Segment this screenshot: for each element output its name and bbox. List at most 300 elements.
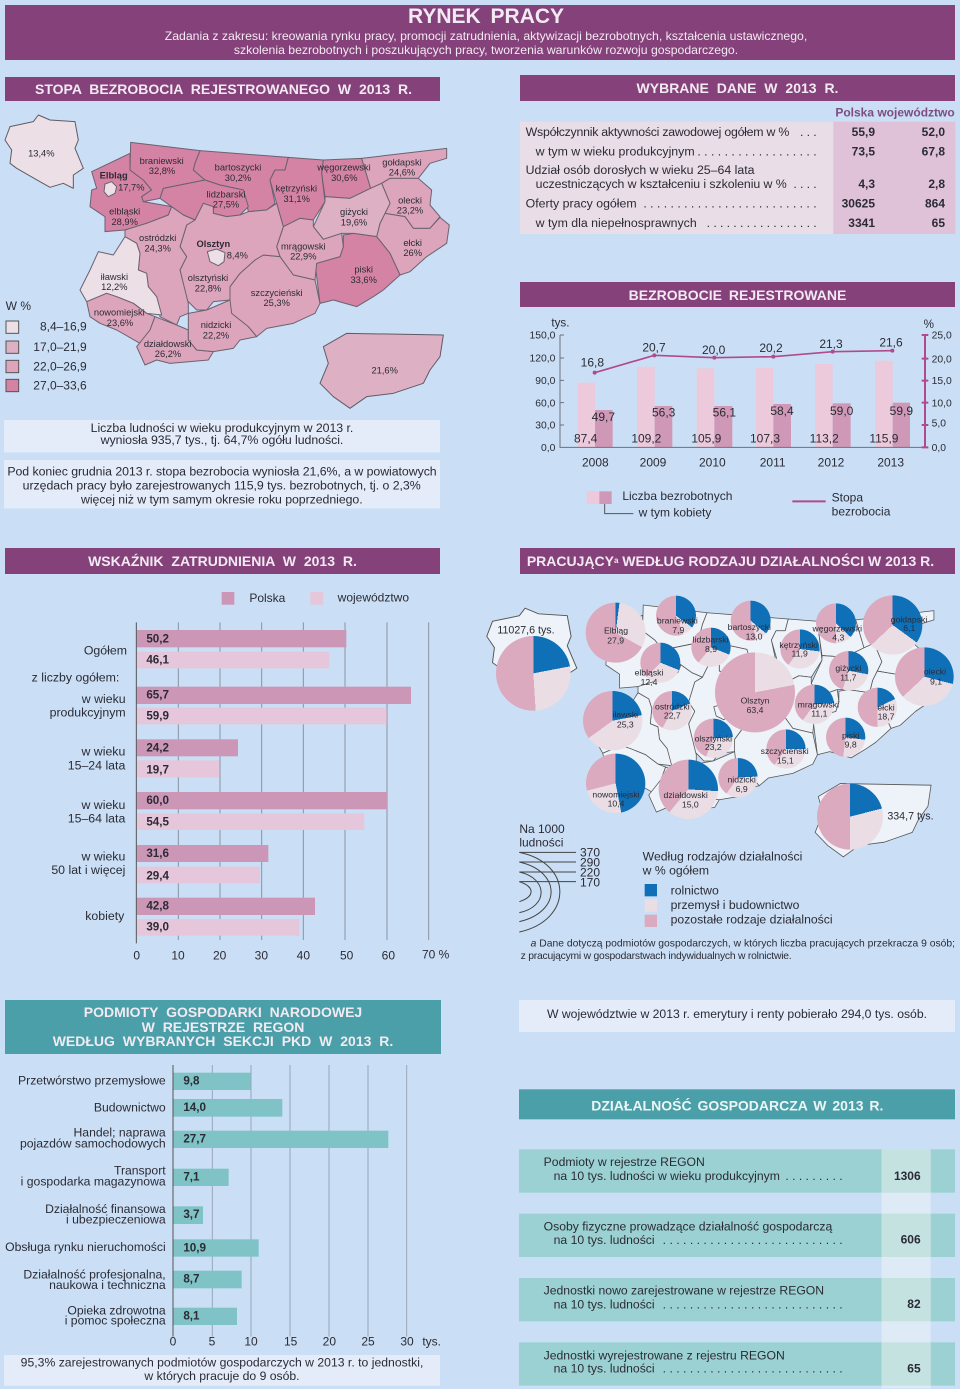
legend: size scale: 290 bbox=[580, 856, 600, 870]
county labels: bartoszycki bbox=[215, 163, 261, 173]
county labels: Elbląg bbox=[100, 170, 128, 180]
category labels: z liczby ogółem: bbox=[32, 670, 119, 684]
bar values: 50,2 bbox=[146, 632, 170, 645]
bar values: 31,6 bbox=[146, 847, 170, 860]
map: Poland inset: 13,4% bbox=[28, 149, 55, 159]
category labels: w wieku bbox=[80, 798, 125, 812]
legend: sector types: rolnictwo bbox=[671, 884, 719, 898]
county labels: 12,2% bbox=[101, 282, 128, 292]
bars bbox=[173, 1073, 388, 1325]
bar values: 10,9 bbox=[183, 1241, 207, 1254]
county labels: nidzicki bbox=[201, 320, 231, 330]
subtitle: szkolenia bezrobotnych i poszukujących pracy, tworzenia warunków rozwoju gospodarczego. bbox=[234, 43, 738, 57]
value labels: 105,9 bbox=[691, 431, 722, 445]
legend: sector types: Według rodzajów działalności bbox=[643, 850, 802, 864]
pie labels: piski bbox=[842, 731, 859, 741]
category labels: Działalność finansowa bbox=[45, 1202, 166, 1216]
bar values: 8,1 bbox=[183, 1310, 200, 1323]
county labels: węgorzewski bbox=[316, 163, 371, 173]
table: selected data: uczestniczących w kształceniu i szkoleniu w % bbox=[536, 177, 787, 191]
category labels: 50 lat i więcej bbox=[51, 863, 125, 877]
category labels bbox=[5, 1073, 166, 1328]
heading: wskaźnik zatrudnienia: WSKAŹNIK ZATRUDNIENIA W 2013 R. bbox=[88, 553, 357, 569]
pie labels: giżycki bbox=[835, 663, 861, 673]
callout: small entities: 95,3% zarejestrowanych podmiotów gospodarczych w 2013 r. to jednostki, bbox=[21, 1356, 423, 1370]
legend: W %: 22,0–26,9 bbox=[33, 359, 87, 373]
footnote: z pracującymi w gospodarstwach indywidualnych w rolnictwie. bbox=[521, 951, 792, 962]
bar values: 46,1 bbox=[146, 653, 170, 666]
value labels: 59,9 bbox=[890, 404, 913, 418]
pie labels: olecki bbox=[924, 667, 946, 677]
pie labels: 4,3 bbox=[832, 633, 845, 643]
year labels: 2010 bbox=[699, 456, 726, 470]
callout: working-age population bbox=[4, 420, 440, 452]
county labels: kętrzyński bbox=[276, 184, 317, 194]
bars: total unemployed bbox=[578, 361, 893, 447]
category labels: Przetwórstwo przemysłowe bbox=[18, 1073, 166, 1087]
axis labels: 50 bbox=[340, 948, 354, 962]
value labels: 20,7 bbox=[642, 341, 666, 355]
axis labels: 0 bbox=[133, 948, 140, 962]
title banner bbox=[5, 5, 955, 60]
table: selected data: w tym dla niepełnosprawnych bbox=[535, 216, 697, 230]
county labels: ostródzki bbox=[139, 233, 176, 243]
category labels: i ubezpieczeniowa bbox=[66, 1212, 166, 1226]
heading: wskaźnik zatrudnienia bbox=[5, 548, 440, 574]
row labels: . . . . . . . . . bbox=[785, 1169, 843, 1183]
pie labels: 334,7 tys. bbox=[887, 810, 934, 822]
county labels: 30,6% bbox=[331, 173, 358, 183]
heading: pracujący: a bbox=[614, 556, 618, 565]
bar values bbox=[146, 632, 170, 934]
value labels bbox=[574, 335, 913, 445]
pie labels: 11027,6 tys. bbox=[497, 624, 555, 636]
category labels: Handel; naprawa bbox=[74, 1126, 166, 1140]
pie labels: 23,2 bbox=[705, 742, 722, 752]
combo chart: registered unemployed and rate: 0,0 bbox=[932, 443, 946, 454]
legend: w tym kobiety bbox=[638, 506, 711, 520]
pie labels: 9,1 bbox=[930, 677, 942, 687]
pie labels: 11,9 bbox=[792, 649, 808, 659]
axis labels: 70 % bbox=[422, 948, 450, 962]
table: selected data: . . . . bbox=[793, 177, 817, 191]
category labels: Opieka zdrowotna bbox=[67, 1303, 166, 1317]
legend: Liczba bezrobotnych bbox=[622, 489, 732, 503]
table: selected data bbox=[520, 105, 956, 234]
callout: working-age population: Liczba ludności w wieku produkcyjnym w 2013 r. bbox=[91, 421, 353, 435]
row labels: Jednostki wyrejestrowane z rejestru REGON bbox=[544, 1348, 785, 1362]
axis labels: 20 bbox=[323, 1335, 336, 1349]
row values: 82 bbox=[907, 1297, 921, 1311]
pie labels: braniewski bbox=[657, 615, 698, 625]
category labels: w wieku bbox=[81, 692, 126, 706]
row labels: Jednostki nowo zarejestrowane w rejestrze REGON bbox=[544, 1284, 824, 1298]
heading: wybrane dane: WYBRANE DANE W 2013 R. bbox=[637, 80, 838, 96]
bar values: 54,5 bbox=[146, 815, 170, 828]
table: selected data: 65 bbox=[932, 216, 945, 230]
pie labels bbox=[497, 614, 946, 822]
bar values: 24,2 bbox=[146, 741, 170, 754]
heading: wybrane dane bbox=[520, 75, 955, 101]
rows bbox=[519, 1149, 955, 1386]
pie labels: 12,4 bbox=[641, 677, 658, 687]
value column bbox=[882, 1149, 931, 1388]
pie labels: mrągowski bbox=[798, 699, 839, 709]
pie labels: kętrzyński bbox=[779, 640, 818, 650]
county labels: giżycki bbox=[340, 207, 368, 217]
bar values: 8,7 bbox=[183, 1273, 200, 1286]
map: Poland inset bbox=[5, 115, 83, 188]
combo chart: registered unemployed and rate: 30,0 bbox=[535, 421, 556, 432]
pie labels: 8,9 bbox=[705, 644, 717, 654]
county labels: nowomiejski bbox=[94, 308, 145, 318]
axis labels: 0 bbox=[170, 1335, 177, 1349]
heading: stopa bezrobocia bbox=[5, 77, 440, 101]
bars: women bbox=[595, 403, 910, 447]
bar values: 29,4 bbox=[146, 869, 170, 882]
table: selected data: 2,8 bbox=[928, 177, 945, 191]
county labels: 23,6% bbox=[107, 318, 133, 328]
callout: working-age population: wyniosła 935,7 tys., tj. 64,7% ogółu ludności. bbox=[100, 433, 343, 447]
pie labels: olsztyński bbox=[695, 733, 732, 743]
category labels: kobiety bbox=[85, 909, 125, 923]
county labels: szczycieński bbox=[251, 288, 303, 298]
combo chart: registered unemployed and rate: 25,0 bbox=[932, 331, 952, 342]
county labels: 25,3% bbox=[263, 298, 290, 308]
bar values: 7,1 bbox=[183, 1171, 200, 1184]
heading: podmioty gospodarki: PODMIOTY GOSPODARKI NARODOWEJ bbox=[84, 1004, 362, 1020]
map: voivodeship counties bbox=[80, 142, 449, 365]
pie labels: nowomiejski bbox=[592, 789, 640, 799]
value labels: 87,4 bbox=[574, 431, 598, 445]
map: voivodeship total bbox=[320, 333, 443, 408]
pie labels: 7,9 bbox=[672, 625, 685, 635]
row values: 1306 bbox=[894, 1169, 921, 1183]
heading: stopa bezrobocia: STOPA BEZROBOCIA REJESTROWANEGO W 2013 R. bbox=[35, 81, 412, 97]
combo chart: registered unemployed and rate: 5,0 bbox=[932, 419, 946, 430]
pie labels: Olsztyn bbox=[741, 696, 770, 706]
pie labels: ełcki bbox=[877, 702, 895, 712]
combo chart: registered unemployed and rate: 90,0 bbox=[535, 376, 556, 387]
pie labels: 22,7 bbox=[664, 711, 681, 721]
legend: sector types: pozostałe rodzaje działalności bbox=[671, 913, 833, 927]
table: selected data: Polska województwo bbox=[835, 105, 955, 119]
legend: size scale bbox=[519, 822, 600, 932]
combo chart: registered unemployed and rate: 0,0 bbox=[541, 443, 556, 454]
value labels: 109,2 bbox=[631, 431, 662, 445]
county labels: 26% bbox=[403, 248, 422, 258]
text block: unemployment summary: Pod koniec grudnia 2013 r. stopa bezrobocia wyniosła 21,6%, a w powiatowych bbox=[7, 464, 437, 478]
combo chart: registered unemployed and rate: 120,0 bbox=[529, 354, 556, 365]
county labels: 30,2% bbox=[225, 173, 251, 183]
axis labels: 30 bbox=[400, 1335, 414, 1349]
category labels: pojazdów samochodowych bbox=[20, 1136, 166, 1150]
heading: podmioty gospodarki: WEDŁUG WYBRANYCH SEKCJI PKD W 2013 R. bbox=[53, 1033, 393, 1049]
county labels: 22,2% bbox=[203, 330, 229, 340]
year labels: 2013 bbox=[877, 456, 904, 470]
callout: small entities bbox=[4, 1355, 440, 1386]
bar values: 9,8 bbox=[183, 1075, 200, 1088]
axis labels: 40 bbox=[297, 948, 310, 962]
row values bbox=[894, 1169, 921, 1375]
county labels: 31,1% bbox=[283, 194, 310, 204]
county labels bbox=[94, 156, 423, 359]
value labels: 20,2 bbox=[759, 341, 783, 355]
legend: Polska bbox=[249, 591, 286, 605]
pie labels: 6,9 bbox=[736, 784, 748, 794]
row labels: . . . . . . . . . . . . . . . . . . . . . . . . . . . bbox=[663, 1297, 843, 1311]
choropleth map: unemployment rate bbox=[4, 114, 450, 409]
bar chart: employment rate bbox=[32, 590, 450, 962]
legend: size scale: Na 1000 bbox=[519, 822, 565, 836]
pie labels: szczycieński bbox=[761, 746, 809, 756]
value labels: 56,3 bbox=[652, 405, 676, 419]
bar chart: entities in REGON bbox=[4, 1065, 441, 1386]
axis labels: tys. bbox=[422, 1335, 441, 1349]
category labels: w wieku bbox=[80, 745, 125, 759]
county labels: elbląski bbox=[109, 207, 140, 217]
bar values: 59,9 bbox=[146, 710, 170, 723]
year labels bbox=[582, 456, 904, 470]
county labels: 26,2% bbox=[155, 349, 181, 359]
county labels: gołdapski bbox=[382, 157, 422, 167]
county labels: 22,9% bbox=[290, 252, 317, 262]
value labels: 21,6 bbox=[879, 335, 903, 349]
table: selected data: Oferty pracy ogółem bbox=[526, 197, 637, 211]
year labels: 2012 bbox=[818, 456, 845, 470]
pie labels: gołdapski bbox=[891, 614, 927, 624]
county labels: 24,3% bbox=[144, 244, 171, 254]
value labels: 113,2 bbox=[810, 431, 839, 445]
table: selected data: . . . . . . . . . . . . . . . . . bbox=[707, 216, 817, 230]
pie labels: nidzicki bbox=[727, 775, 756, 785]
row values: 606 bbox=[901, 1233, 921, 1247]
pie labels: węgorzewski bbox=[812, 623, 862, 633]
gridlines bbox=[178, 622, 429, 940]
pie labels: 25,3 bbox=[617, 719, 634, 729]
table: selected data: 864 bbox=[925, 197, 945, 211]
row labels: na 10 tys. ludności bbox=[554, 1362, 655, 1376]
bar values: 39,0 bbox=[146, 921, 169, 934]
value labels: 58,4 bbox=[770, 404, 794, 418]
axis labels: 5 bbox=[209, 1335, 216, 1349]
table: selected data: . . . . . . . . . . . . . . . . . . . . . . . . . . bbox=[643, 197, 817, 211]
heading: bezrobocie rejestrowane: BEZROBOCIE REJESTROWANE bbox=[629, 286, 846, 302]
combo chart: registered unemployed and rate: 15,0 bbox=[932, 376, 952, 387]
heading bbox=[519, 1089, 955, 1119]
county labels: 32,8% bbox=[149, 166, 175, 176]
county labels: 17,7% bbox=[118, 183, 145, 193]
pie labels: 27,9 bbox=[607, 635, 624, 645]
legend: size scale: ludności bbox=[519, 836, 563, 850]
combo chart: registered unemployed and rate: 20,0 bbox=[932, 354, 952, 365]
value labels: 56,1 bbox=[713, 405, 736, 419]
bar values: 14,0 bbox=[183, 1101, 206, 1114]
category labels: Budownictwo bbox=[94, 1101, 166, 1115]
table: selected data: Udział osób dorosłych w wieku 25–64 lata bbox=[526, 163, 755, 177]
table: selected data: 55,9 bbox=[852, 125, 875, 139]
bar values: 19,7 bbox=[146, 763, 169, 776]
year labels: 2011 bbox=[760, 456, 786, 470]
category labels: produkcyjnym bbox=[50, 706, 126, 720]
footnote bbox=[521, 939, 955, 962]
table: selected data: 73,5 bbox=[852, 144, 875, 158]
bar values: 65,7 bbox=[146, 689, 169, 702]
value labels: 16,8 bbox=[581, 355, 604, 369]
panel: działalność gospodarcza bbox=[519, 1089, 955, 1388]
county labels: ełcki bbox=[403, 238, 422, 248]
right axis bbox=[922, 335, 928, 447]
county labels: 8,4% bbox=[227, 251, 248, 261]
left axis bbox=[560, 335, 923, 447]
axis labels: 15 bbox=[284, 1335, 298, 1349]
county labels: 19,6% bbox=[341, 217, 367, 227]
text block: unemployment summary: urzędach pracy było zarejestrowanych 115,9 tys. bezrobotnych, tj. o 2,3% bbox=[23, 478, 421, 492]
heading: podmioty gospodarki: W REJESTRZE REGON bbox=[142, 1019, 304, 1035]
legend bbox=[222, 590, 409, 605]
county labels: 27,5% bbox=[213, 199, 239, 209]
axis labels: 25 bbox=[361, 1335, 375, 1349]
county labels: 24,6% bbox=[389, 167, 415, 177]
gridlines bbox=[212, 1065, 407, 1337]
county labels: mrągowski bbox=[281, 242, 326, 252]
county labels: piski bbox=[354, 264, 373, 274]
axis labels: 30 bbox=[255, 948, 268, 962]
legends and footnote: employed bbox=[519, 822, 955, 962]
pie labels: 6,1 bbox=[903, 623, 916, 633]
table: selected data: . . . bbox=[800, 125, 817, 139]
heading: pracujący bbox=[520, 548, 955, 574]
row labels bbox=[544, 1155, 843, 1376]
combo chart: registered unemployed and rate: 10,0 bbox=[932, 398, 952, 409]
pie labels: 13,0 bbox=[746, 631, 763, 641]
pie labels: lidzbarski bbox=[693, 634, 729, 644]
county labels: olsztyński bbox=[188, 273, 228, 283]
year labels: 2008 bbox=[582, 456, 609, 470]
county labels: olecki bbox=[398, 195, 422, 205]
callouts: population and unemployment summary bbox=[4, 420, 440, 508]
category labels: 15–24 lata bbox=[68, 758, 125, 772]
legend: sector types: przemysł i budownictwo bbox=[671, 898, 800, 912]
axis labels: 20 bbox=[213, 948, 227, 962]
value labels: 21,3 bbox=[819, 337, 843, 351]
text block: unemployment summary: więcej niż w tym samym okresie roku poprzedniego. bbox=[80, 492, 363, 506]
value labels: 115,9 bbox=[869, 431, 899, 445]
county labels: lidzbarski bbox=[207, 189, 245, 199]
axis labels: 10 bbox=[244, 1335, 258, 1349]
footnote: a Dane dotyczą podmiotów gospodarczych, w których liczba pracujących przekracza 9 osób; bbox=[531, 939, 955, 950]
pie labels: 63,4 bbox=[747, 705, 764, 715]
table: selected data: . . . . . . . . . . . . . . . . . . bbox=[697, 144, 817, 158]
legend: W %: 17,0–21,9 bbox=[33, 340, 87, 354]
map: base outlines for employed bbox=[486, 604, 934, 858]
pie labels: bartoszycki bbox=[728, 622, 771, 632]
county labels: działdowski bbox=[144, 339, 192, 349]
legend: size scale: 370 bbox=[580, 846, 600, 860]
legend bbox=[587, 489, 891, 520]
pie labels: Elbląg bbox=[604, 625, 628, 635]
legend: size scale: 170 bbox=[580, 876, 600, 890]
table: selected data: Współczynnik aktywności zawodowej ogółem w % bbox=[526, 125, 789, 139]
bar values bbox=[183, 1075, 207, 1323]
combo chart: registered unemployed and rate: % bbox=[924, 318, 934, 331]
pie labels: działdowski bbox=[664, 790, 708, 800]
bars: województwo bbox=[137, 652, 387, 936]
callout: pensions: W województwie w 2013 r. emerytury i renty pobierało 294,0 tys. osób. bbox=[547, 1007, 927, 1021]
bars: Polska bbox=[137, 630, 411, 915]
pie labels: 9,8 bbox=[845, 739, 857, 749]
combo chart: registered unemployed and rate: 60,0 bbox=[535, 398, 556, 409]
pie labels: 15,1 bbox=[777, 755, 794, 765]
county labels: 22,8% bbox=[195, 283, 221, 293]
subtitle bbox=[165, 29, 807, 57]
value labels: 49,7 bbox=[592, 410, 615, 424]
county labels: braniewski bbox=[140, 156, 184, 166]
table: selected data: 52,0 bbox=[922, 125, 945, 139]
subtitle: Zadania z zakresu: kreowania rynku pracy, promocji zatrudnienia, aktywizacji bezrobotnych, kształcenia ustawicznego, bbox=[165, 29, 807, 43]
category labels: Transport bbox=[114, 1164, 166, 1178]
axis labels bbox=[170, 1335, 441, 1349]
pie labels: ostródzki bbox=[655, 701, 690, 711]
pie labels: 11,7 bbox=[840, 673, 857, 683]
value labels: 59,0 bbox=[830, 404, 854, 418]
value labels: 107,3 bbox=[750, 431, 780, 445]
county labels: 28,9% bbox=[111, 217, 138, 227]
legend: W %: 8,4–16,9 bbox=[40, 320, 87, 334]
axis labels: 60 bbox=[382, 948, 395, 962]
row labels: na 10 tys. ludności w wieku produkcyjnym bbox=[554, 1169, 780, 1183]
category labels: Ogółem bbox=[84, 644, 127, 658]
value labels: 20,0 bbox=[702, 343, 726, 357]
callout: small entities: w których pracuje do 9 osób. bbox=[143, 1369, 300, 1383]
pie labels: iławski bbox=[613, 710, 638, 720]
map: voivodeship total: 21,6% bbox=[371, 365, 398, 375]
combo chart: registered unemployed and rate bbox=[529, 316, 952, 520]
legend: województwo bbox=[337, 590, 409, 604]
legend: size scale: 220 bbox=[580, 866, 600, 880]
row labels: . . . . . . . . . . . . . . . . . . . . . . . . . . . bbox=[663, 1233, 843, 1247]
row labels: na 10 tys. ludności bbox=[554, 1297, 655, 1311]
combo chart: registered unemployed and rate: 150,0 bbox=[529, 331, 556, 342]
county labels: 23,2% bbox=[397, 205, 423, 215]
legend: sector types: w % ogółem bbox=[642, 864, 709, 878]
combo chart: registered unemployed and rate: tys. bbox=[551, 316, 569, 329]
heading: pracujący: PRACUJĄCY WEDŁUG RODZAJU DZIAŁALNOŚCI W 2013 R. bbox=[527, 553, 934, 569]
category labels: Działalność profesjonalna, bbox=[23, 1268, 166, 1282]
pie charts: employed by sector bbox=[496, 595, 954, 850]
row labels: Podmioty w rejestrze REGON bbox=[544, 1155, 705, 1169]
pie labels: 15,0 bbox=[682, 799, 699, 809]
category labels: i pomoc społeczna bbox=[65, 1314, 166, 1328]
category labels: w wieku bbox=[80, 849, 125, 863]
table: selected data: 3341 bbox=[848, 216, 875, 230]
bar values: 27,7 bbox=[183, 1133, 206, 1146]
legend: W %: 27,0–33,6 bbox=[33, 379, 87, 393]
line: unemployment rate bbox=[593, 349, 894, 375]
table: selected data: w tym w wieku produkcyjnym bbox=[535, 144, 695, 158]
heading: bezrobocie rejestrowane bbox=[520, 282, 955, 307]
bar values: 42,8 bbox=[146, 900, 170, 913]
legend: bezrobocia bbox=[832, 504, 891, 518]
pie labels: 11,1 bbox=[811, 709, 828, 719]
axis labels bbox=[133, 948, 450, 962]
bar values: 60,0 bbox=[146, 794, 169, 807]
title: RYNEK PRACY bbox=[408, 5, 564, 28]
category labels bbox=[32, 644, 127, 923]
row labels: na 10 tys. ludności bbox=[554, 1233, 655, 1247]
row labels: Osoby fizyczne prowadzące działalność gospodarczą bbox=[544, 1219, 832, 1233]
table: selected data: 67,8 bbox=[922, 144, 945, 158]
